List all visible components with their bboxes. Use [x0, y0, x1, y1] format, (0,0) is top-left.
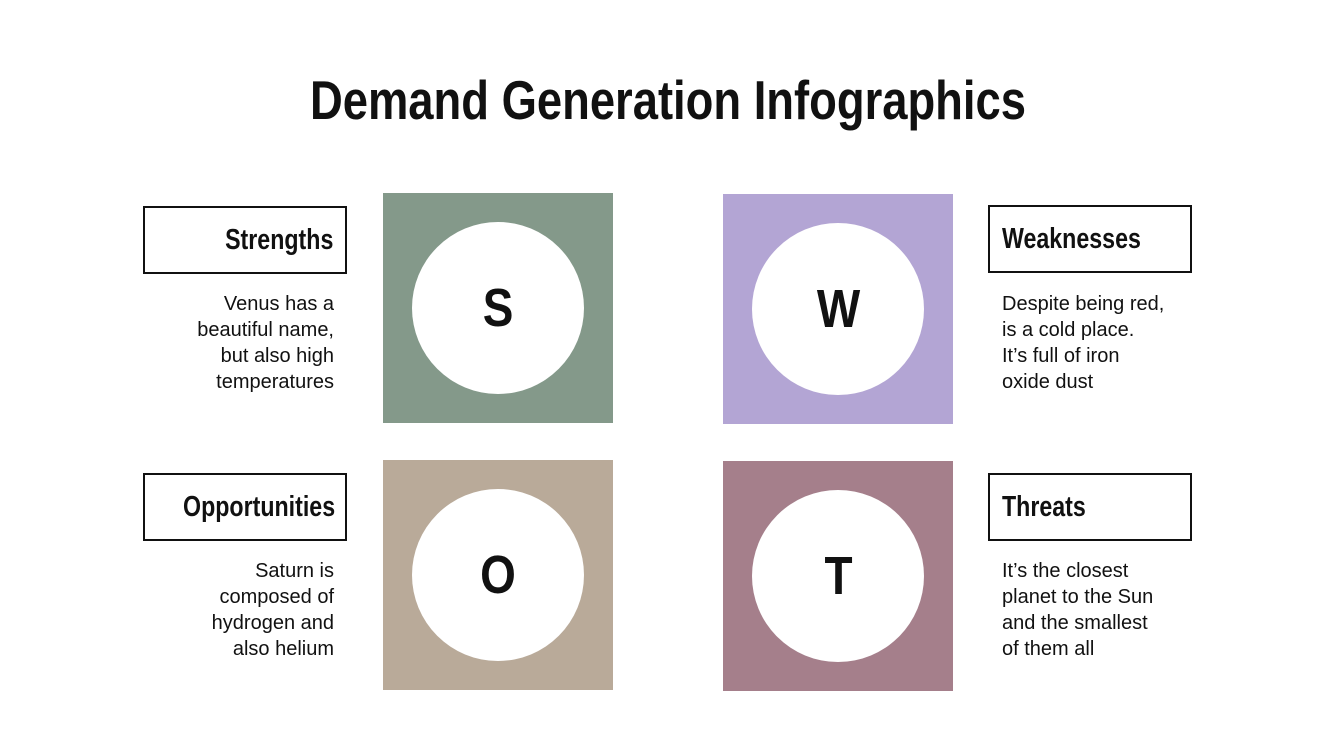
- label: Opportunities: Opportunities: [183, 491, 335, 523]
- label: Opportunities: [143, 473, 347, 541]
- label: Weaknesses: [988, 205, 1192, 273]
- text: threats: It’s the closest: [1002, 560, 1128, 582]
- text: opportunities: Saturn is: [255, 560, 334, 582]
- text: strengths: but also high: [221, 345, 334, 367]
- letter circle T: T: [824, 546, 852, 606]
- letter circle W: W: [816, 279, 860, 339]
- label: Threats: Threats: [1002, 491, 1086, 523]
- text: strengths: beautiful name,: [197, 319, 334, 341]
- letter circle S: S: [483, 278, 513, 338]
- text: weaknesses: Despite being red,: [1002, 293, 1164, 315]
- text: strengths: [197, 293, 334, 393]
- text: weaknesses: is a cold place.: [1002, 319, 1134, 341]
- label: Strengths: [143, 206, 347, 274]
- text: opportunities: also helium: [233, 638, 334, 660]
- text: strengths: Venus has a: [224, 293, 334, 315]
- text: weaknesses: [1002, 293, 1164, 393]
- panel: W square: [723, 194, 953, 424]
- label: Threats: [988, 473, 1192, 541]
- text: strengths: temperatures: [216, 371, 334, 393]
- label: Strengths: Strengths: [225, 224, 333, 256]
- text: weaknesses: It’s full of iron: [1002, 345, 1119, 367]
- panel: T square: [723, 461, 953, 691]
- text: threats: of them all: [1002, 638, 1094, 660]
- text: opportunities: hydrogen and: [212, 612, 334, 634]
- letter circle S: [412, 222, 584, 394]
- letter circle T: [752, 490, 924, 662]
- text: weaknesses: oxide dust: [1002, 371, 1093, 393]
- panel: O square: [383, 460, 613, 690]
- text: threats: planet to the Sun: [1002, 586, 1153, 608]
- text: threats: and the smallest: [1002, 612, 1148, 634]
- label: Weaknesses: Weaknesses: [1002, 223, 1141, 255]
- panel: S square: [383, 193, 613, 423]
- title: Demand Generation Infographics: [310, 69, 1026, 131]
- text: threats: [1002, 560, 1153, 660]
- letter circle O: O: [480, 545, 516, 605]
- letter circle O: [412, 489, 584, 661]
- text: opportunities: [212, 560, 334, 660]
- letter circle W: [752, 223, 924, 395]
- text: opportunities: composed of: [219, 586, 334, 608]
